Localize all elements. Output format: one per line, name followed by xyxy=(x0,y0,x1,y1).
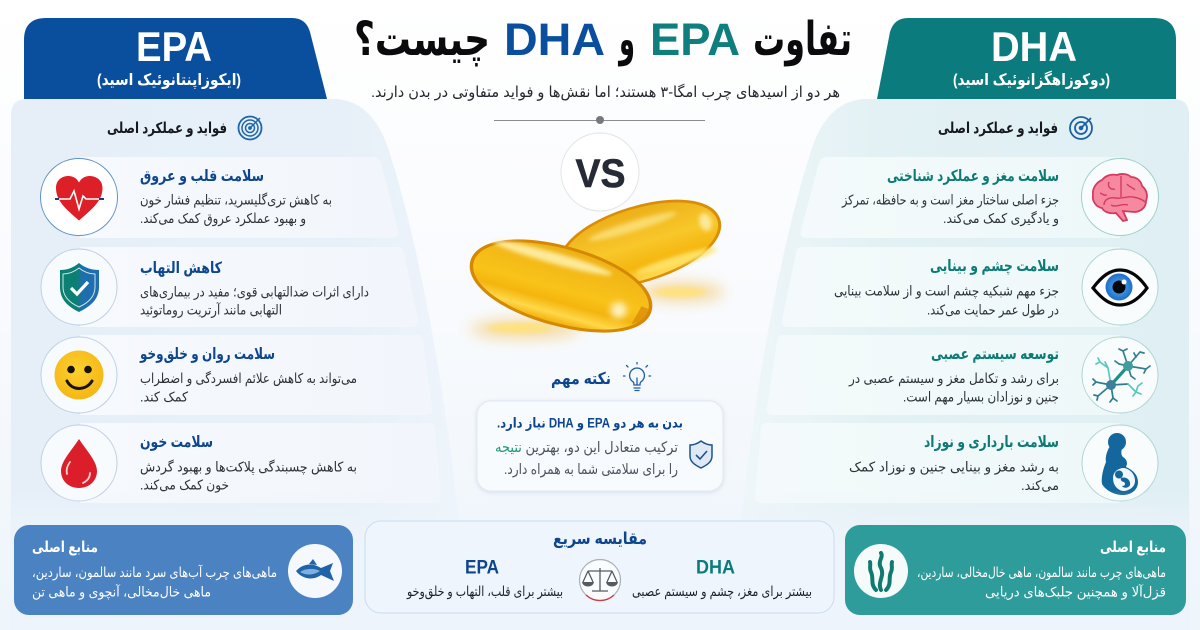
header tab: EPA: EPA xyxy=(136,23,212,70)
panel: DHA benefits xyxy=(742,99,1189,630)
panel heading: فواید و عملکرد اصلی xyxy=(107,120,227,137)
panel: EPA sources: منابع اصلی xyxy=(32,539,98,556)
header tab: EPA: (ایکوزاپنتانوئیک اسید) xyxy=(97,72,241,90)
panel: quick comparison: مقایسه سریع xyxy=(553,530,647,549)
card: nervous system: جنین و نوزادان بسیار مهم است. xyxy=(903,390,1059,406)
front capsule xyxy=(460,222,662,350)
EPA column: بیشتر برای قلب، التهاب و خلق‌وخو xyxy=(406,584,563,600)
card: brain xyxy=(801,157,1158,238)
card: nervous system xyxy=(767,335,1158,415)
card: eye xyxy=(782,247,1158,327)
callout: important note: را برای سلامتی شما به همراه دارد. xyxy=(504,462,678,478)
panel: quick comparison xyxy=(365,521,834,613)
icon: eye xyxy=(1082,249,1158,325)
card: mood: سلامت روان و خلق‌وخو xyxy=(139,346,275,363)
EPA column xyxy=(406,558,563,600)
icon: balance scale xyxy=(580,560,620,601)
icon: neuron xyxy=(1082,337,1158,413)
card: brain: سلامت مغز و عملکرد شناختی xyxy=(887,168,1059,185)
VS badge: VS xyxy=(576,152,626,196)
DHA column: DHA xyxy=(696,558,735,578)
card: heart health: سلامت قلب و عروق xyxy=(140,168,264,185)
header tab: DHA xyxy=(877,18,1176,99)
note heading: نکته مهم xyxy=(551,370,611,389)
panel: EPA benefits xyxy=(11,99,458,630)
card: mood: کمک کند. xyxy=(140,390,189,404)
card: mood: می‌تواند به کاهش علائم افسردگی و اضطراب xyxy=(140,370,357,387)
DHA column: بیشتر برای مغز، چشم و سیستم عصبی xyxy=(632,584,812,600)
note heading xyxy=(551,362,650,390)
card: blood: سلامت خون xyxy=(140,434,213,451)
card: inflammation: دارای اثرات ضدالتهابی قوی؛ مفید در بیماری‌های xyxy=(140,284,369,300)
icon: smiley xyxy=(41,337,117,413)
card: eye: جزء مهم شبکیه چشم است و از سلامت بینایی xyxy=(834,284,1059,300)
panel: EPA sources xyxy=(14,525,353,615)
card: brain: و یادگیری کمک می‌کند. xyxy=(943,210,1059,227)
callout: important note xyxy=(477,401,723,491)
title: و xyxy=(618,12,635,67)
card: inflammation xyxy=(41,247,418,327)
callout: important note: ترکیب متعادل این دو، بهترین نتیجه xyxy=(495,440,678,456)
panel background xyxy=(11,99,458,630)
panel: EPA sources: ماهی‌های چرب آب‌های سرد مانند سالمون، ساردین، xyxy=(32,564,277,581)
callout: important note: بدن به هر دو EPA و DHA نیاز دارد. xyxy=(497,416,683,430)
panel: DHA sources: قزل‌آلا و همچنین جلبک‌های دریایی xyxy=(985,584,1166,600)
DHA column xyxy=(632,558,812,600)
card: heart health: به کاهش تری‌گلیسرید، تنظیم فشار خون xyxy=(140,192,332,208)
header tab: EPA xyxy=(24,18,327,99)
VS badge xyxy=(561,133,639,211)
icon: blood drop xyxy=(41,425,117,501)
card: blood: به کاهش چسبندگی پلاکت‌ها و بهبود گردش xyxy=(140,458,357,476)
title: EPA xyxy=(650,14,740,65)
icon: heart xyxy=(40,158,118,236)
card: eye: در طول عمر حمایت می‌کند. xyxy=(927,302,1059,318)
panel heading: فواید و عملکرد اصلی xyxy=(938,120,1058,137)
card: blood xyxy=(41,423,441,503)
panel background xyxy=(742,99,1189,630)
panel: DHA sources: منابع اصلی xyxy=(1100,539,1166,556)
icon: seaweed xyxy=(854,544,908,598)
icon: small shield xyxy=(690,441,712,468)
card: heart health xyxy=(40,157,398,238)
subtitle: هر دو از اسیدهای چرب امگا-۳ هستند؛ اما نقش‌ها و فواید متفاوتی در بدن دارند. xyxy=(371,83,840,101)
card: pregnancy: می‌کند. xyxy=(1021,478,1059,493)
icon: shield xyxy=(41,249,117,325)
icon: brain xyxy=(1082,158,1158,236)
card: nervous system: برای رشد و تکامل مغز و سیستم عصبی در xyxy=(848,371,1059,387)
illustration: omega-3 capsules xyxy=(460,183,731,350)
icon: fish xyxy=(288,544,342,598)
header tab: DHA: (دوکوزاهگزانوئیک اسید) xyxy=(953,70,1110,89)
rear capsule xyxy=(549,183,731,305)
card: nervous system: توسعه سیستم عصبی xyxy=(931,346,1059,363)
card: brain: جزء اصلی ساختار مغز است و به حافظه، تمرکز xyxy=(841,192,1059,208)
icon: light bulb xyxy=(624,362,650,390)
title: چیست؟ xyxy=(354,12,490,67)
card: blood: خون کمک می‌کند. xyxy=(140,478,229,494)
panel: EPA sources: ماهی خال‌مخالی، آنچوی و ماهی تن xyxy=(32,584,211,600)
card: heart health: و بهبود عملکرد عروق کمک می‌کند. xyxy=(140,211,306,227)
EPA column: EPA xyxy=(465,558,499,578)
icon: pregnancy silhouette xyxy=(1082,425,1158,501)
card: pregnancy: سلامت بارداری و نوزاد xyxy=(924,434,1059,451)
header tab: DHA: DHA xyxy=(991,23,1077,70)
card: pregnancy xyxy=(755,423,1158,503)
card: eye: سلامت چشم و بینایی xyxy=(930,258,1059,276)
panel: DHA sources xyxy=(845,525,1186,615)
card: mood xyxy=(41,335,432,415)
card: inflammation: التهابی مانند آرتریت روماتوئید xyxy=(140,302,282,318)
bottom band xyxy=(10,490,1190,630)
title: DHA xyxy=(504,14,605,65)
title: تفاوت xyxy=(753,12,852,67)
card: inflammation: کاهش التهاب xyxy=(140,260,223,277)
card: pregnancy: به رشد مغز و بینایی جنین و نوزاد کمک xyxy=(849,460,1059,476)
title xyxy=(354,12,852,67)
